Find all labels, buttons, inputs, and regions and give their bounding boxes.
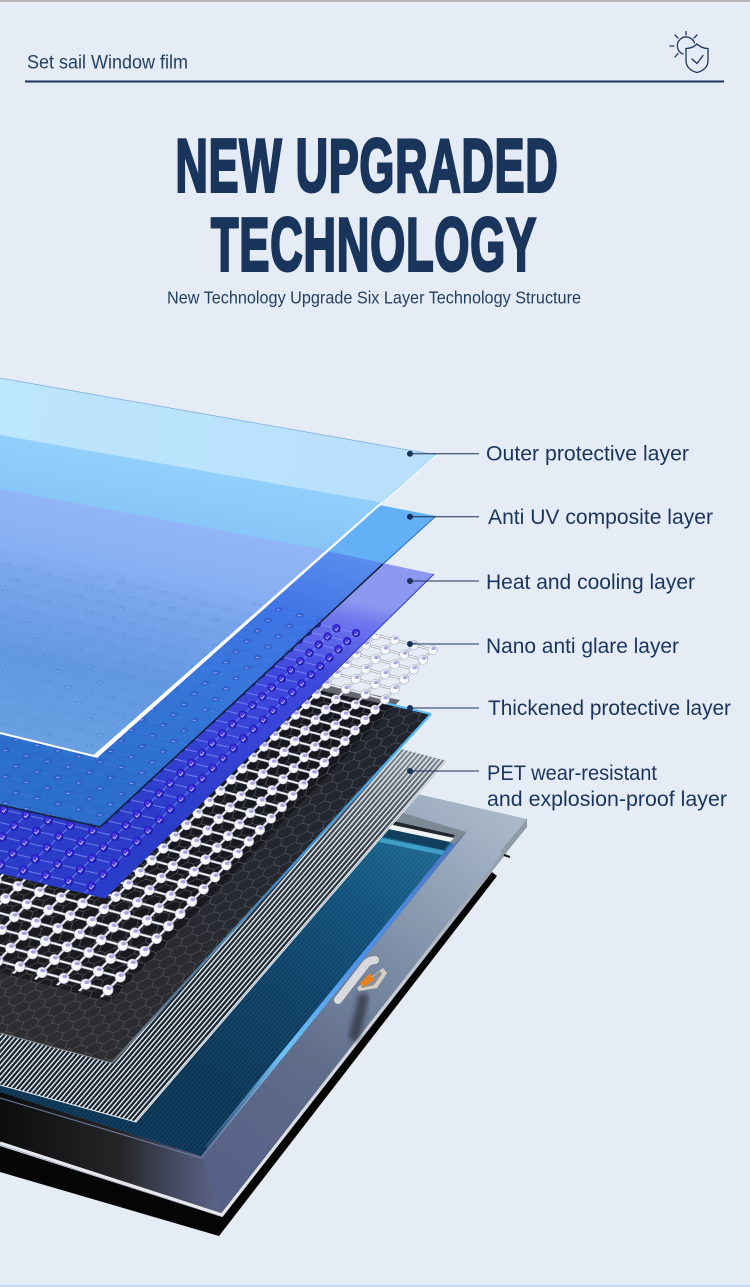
callout: anti UV composite layer: Anti UV composite layer xyxy=(488,506,713,529)
subtitle: New Technology Upgrade Six Layer Technology Structure xyxy=(167,288,581,308)
icon: sun and shield xyxy=(670,32,708,72)
layer 3: heat and cooling film xyxy=(0,564,434,898)
callout: PET wear-resistant and explosion-proof layer xyxy=(407,762,727,811)
layer 4: nano anti glare atom lattice xyxy=(0,634,438,998)
window base xyxy=(0,790,527,1236)
window glass xyxy=(0,800,466,1158)
callout: nano anti glare layer: Nano anti glare layer xyxy=(486,635,679,658)
callout: thickened protective layer: Thickened protective layer xyxy=(488,697,731,720)
layer 1: outer protective film xyxy=(0,378,437,800)
door handle xyxy=(338,960,387,1040)
brand name: Set sail Window film xyxy=(27,52,188,74)
layer 5: thickened protective hex film xyxy=(0,620,431,1063)
layer 6: PET wear-resistant film xyxy=(0,645,447,1122)
layer 2: anti UV composite film xyxy=(0,432,436,827)
title xyxy=(176,124,558,286)
title: TECHNOLOGY xyxy=(211,202,537,286)
callout: PET wear-resistant and explosion-proof layer: PET wear-resistant xyxy=(487,762,657,785)
callout: PET wear-resistant and explosion-proof layer: and explosion-proof layer xyxy=(487,788,727,811)
callout: heat and cooling layer: Heat and cooling layer xyxy=(486,571,695,594)
callout: outer protective layer: Outer protective layer xyxy=(486,442,689,466)
